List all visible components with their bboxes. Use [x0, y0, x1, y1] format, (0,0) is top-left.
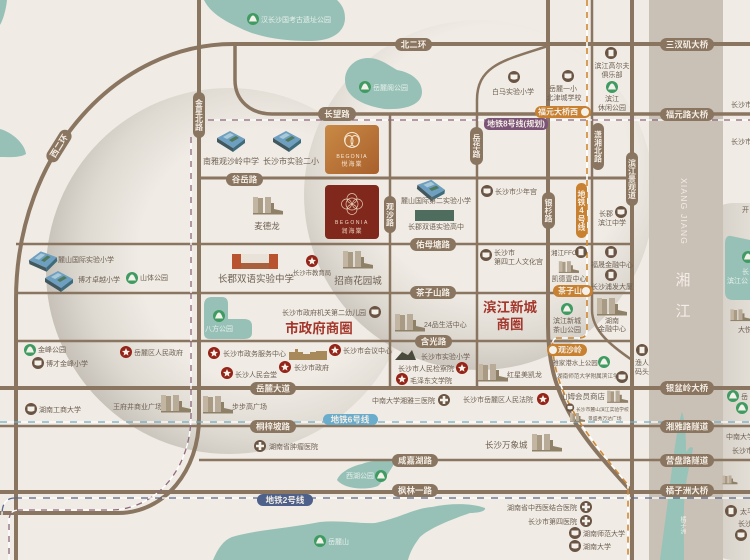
poi: 长沙市岳麓区人民法院 [463, 393, 549, 405]
road label: 潇湘北路 [592, 123, 604, 170]
metro station: 茶子山: 茶子山 [558, 286, 582, 296]
road label: 含光路: 含光路 [421, 336, 447, 346]
poi: 长沙市岳麓区人民法院: 长沙市岳麓区人民法院 [463, 395, 533, 404]
metro label: 地铁6号线: 地铁6号线 [331, 414, 370, 424]
poi: 汉长沙国考古遗址公园 [247, 13, 331, 25]
poi: 长郡双语实验中学: 长郡双语实验中学 [218, 273, 294, 285]
poi: 长郡滨江中学: 长郡 [599, 209, 613, 218]
poi: 长沙市会议中心: 长沙市会议中心 [343, 346, 392, 355]
poi: 中南大学湘雅三医院: 中南大学湘雅三医院 [372, 396, 435, 405]
poi: 滨江新城茶山公园 [553, 303, 581, 334]
poi: 长沙市会议中心 [329, 344, 392, 356]
poi: 长沙市实验小学 [395, 350, 470, 361]
road label: 长望路: 长望路 [324, 109, 350, 119]
poi: 长沙市实验二小: 长沙市实验二小 [263, 156, 319, 166]
poi: 白马实验小学 [492, 71, 534, 96]
east bank labels: 滨江公 [727, 276, 748, 285]
poi: 滨江高尔夫俱乐部: 滨江高尔夫 [594, 61, 630, 70]
shaded circle: riverside district [304, 20, 654, 370]
poi: 滨江休闲公园: 休闲公园 [598, 103, 626, 112]
poi: 长沙市人民检察院: 长沙市人民检察院 [398, 364, 454, 373]
poi: 湖南省中西医结合医院 [507, 501, 592, 513]
poi: 金峰公园: 金峰公园 [38, 345, 66, 354]
poi: 福晟金融中心 [591, 246, 633, 269]
poi: 雅家港水上公园 [552, 356, 610, 368]
poi: 湖南金融中心: 湖南 [605, 316, 619, 325]
poi: 景盛秀万达广场: 景盛秀万达广场 [588, 415, 622, 422]
east bank labels: 开 [742, 206, 749, 214]
tunnel label: 湘雅路隧道 [660, 420, 714, 433]
poi: 红星美凯龙 [478, 364, 542, 382]
logo: 悦海棠: BEGONIA [336, 154, 368, 160]
poi: 湖南大学 [569, 540, 611, 552]
river island: Juzizhou [660, 412, 693, 560]
road label: 观沙路: 观沙路 [386, 202, 394, 228]
poi: 长沙市第四工人文化宫: 长沙市 [494, 248, 515, 257]
poi: 长郡滨江中学 [598, 206, 627, 227]
poi: 长沙市麓山滨江实验学校: 长沙市麓山滨江实验学校 [576, 406, 629, 413]
poi: 长沙市政府 [279, 361, 329, 373]
metro station: 茶子山 [553, 285, 593, 297]
poi: 王府井商业广场 [113, 395, 191, 412]
poi: 长沙万象城: 长沙万象城 [485, 440, 528, 450]
poi: 凯德壹中心 [552, 261, 586, 283]
poi: 中南大学湘雅三医院 [372, 394, 450, 406]
logo: 润海棠: BEGONIA [335, 220, 369, 226]
road label: 岳华路 [470, 127, 483, 165]
poi: 滨江高尔夫俱乐部: 俱乐部 [602, 70, 622, 79]
poi: 汉长沙国考古遗址公园: 汉长沙国考古遗址公园 [261, 15, 331, 24]
poi: 长沙市教育局: 长沙市教育局 [293, 268, 331, 277]
poi: 长沙市政府机关第二幼儿园: 长沙市政府机关第二幼儿园 [282, 308, 366, 317]
poi: 长沙人民会堂: 长沙人民会堂 [235, 370, 277, 379]
road label: 西二环 [44, 127, 74, 165]
poi: 博才卓越小学 [45, 271, 120, 292]
skyline illustration [289, 349, 327, 360]
heading: 滨江新城商圈: 滨江新城 [483, 299, 537, 315]
poi: 麓山国际第二实验小学: 麓山国际第二实验小学 [401, 196, 471, 205]
poi: 长沙市教育局 [293, 255, 331, 277]
poi: 长沙浦发大厦 [591, 269, 633, 291]
poi: 湖南工商大学: 湖南工商大学 [39, 405, 81, 414]
poi: 湖南师范大学 [569, 527, 625, 539]
road label: 银杉路 [542, 192, 555, 229]
logo: 悦海棠: 悦海棠 [341, 160, 363, 168]
road label: 滨江景观道: 滨江景观道 [628, 158, 636, 200]
poi: 渔人码头: 渔人 [635, 358, 649, 367]
poi: 24品生活中心 [395, 314, 467, 332]
tunnel label: 营盘路隧道: 营盘路隧道 [666, 456, 709, 466]
logo: 润海棠: 润海棠 [341, 227, 363, 235]
road label: 佑母塘路: 佑母塘路 [416, 240, 450, 250]
poi: 长沙市麓山滨江实验学校 [566, 403, 629, 413]
metro label: 地铁4号线: 地铁4号线 [577, 189, 586, 231]
poi: 招商花园城 [334, 251, 382, 287]
road label: 桐梓坡路 [250, 420, 296, 433]
poi: 岳麓阁公园: 岳麓阁公园 [373, 83, 408, 92]
bridge label: 银盆岭大桥: 银盆岭大桥 [666, 383, 709, 393]
poi: 岳麓区人民政府: 岳麓区人民政府 [134, 348, 183, 357]
bridge label: 三汊矶大桥: 三汊矶大桥 [666, 40, 709, 50]
poi: 湖南省肿瘤医院: 湖南省肿瘤医院 [269, 442, 318, 451]
river label: 湘江 [675, 272, 691, 320]
road label: 茶子山路 [410, 286, 456, 299]
metro label: 地铁8号线(规划) [484, 118, 548, 130]
river: Xiang Jiang [649, 0, 723, 560]
poi: 王府井商业广场: 王府井商业广场 [113, 402, 162, 411]
east bank labels: 岳 [741, 393, 748, 401]
heading: 市政府商圈: 市政府商圈 [285, 320, 353, 336]
metro label: 地铁4号线 [576, 183, 587, 238]
metro station: 观沙岭: 观沙岭 [558, 344, 582, 354]
poi: 雅家港水上公园: 雅家港水上公园 [552, 358, 598, 367]
poi: 步步高广场 [203, 396, 267, 414]
road label: 西二环: 西二环 [48, 132, 70, 159]
river label: 湘江: 湘 [675, 272, 691, 289]
bridge label: 橘子洲大桥: 橘子洲大桥 [666, 486, 709, 496]
river label: XIANG JIANG: XIANG JIANG [679, 178, 689, 245]
road label: 含光路 [415, 335, 452, 348]
road label: 长望路 [318, 107, 356, 121]
road label: 北二环: 北二环 [401, 40, 427, 50]
bridge label: 银盆岭大桥 [660, 381, 714, 395]
poi: 岳麓一小北津城学校 [546, 70, 582, 102]
heading: 滨江新城商圈: 商圈 [496, 316, 524, 332]
metro station: 观沙岭 [547, 344, 587, 356]
bridge label: 橘子洲大桥 [660, 484, 714, 497]
road label: 潇湘北路: 潇湘北路 [594, 130, 602, 164]
poi: 滨江新城茶山公园: 滨江新城 [553, 316, 581, 325]
east bank labels [722, 100, 750, 541]
road label: 佑母塘路 [410, 238, 456, 251]
poi: 长郡双语实验高中: 长郡双语实验高中 [408, 222, 464, 231]
river label: 湘江: 江 [675, 303, 691, 320]
poi: 西湖公园: 西湖公园 [346, 471, 374, 480]
road label: 谷岳路: 谷岳路 [232, 174, 258, 184]
metro label: 地铁2号线 [257, 494, 313, 506]
road label: 岳华路: 岳华路 [472, 133, 481, 159]
poi: 长沙市第四工人文化宫 [480, 248, 543, 266]
metro label: 地铁8号线(规划): 地铁8号线(规划) [487, 118, 545, 128]
road label: 金星北路: 金星北路 [194, 98, 204, 132]
poi: 长沙市少年宫: 长沙市少年宫 [495, 187, 537, 196]
poi: 博才卓越小学: 博才卓越小学 [78, 275, 120, 284]
road label: 咸嘉湖路: 咸嘉湖路 [398, 456, 432, 466]
poi: 滨江高尔夫俱乐部 [594, 47, 630, 79]
poi: 长沙市第四医院 [528, 515, 592, 527]
poi: 南雅观沙岭中学 [203, 131, 259, 166]
poi: 长沙市人民检察院 [398, 362, 468, 374]
poi: 岳麓山 [314, 535, 349, 547]
poi: 湖南金融中心 [597, 298, 627, 333]
poi: 白马实验小学: 白马实验小学 [492, 87, 534, 96]
poi: 长沙万象城 [485, 434, 562, 452]
poi: 湖南大学: 湖南大学 [583, 542, 611, 551]
poi: 麓山国际实验小学 [28, 249, 114, 274]
road label: 金星北路 [193, 92, 205, 138]
poi: 金峰公园 [24, 344, 66, 356]
poi: 湖南师范大学: 湖南师范大学 [583, 529, 625, 538]
poi: 长郡双语实验高中 [408, 210, 464, 231]
poi: 长沙市政府机关第二幼儿园 [282, 306, 381, 318]
poi: 凯德壹中心: 凯德壹中心 [552, 274, 586, 283]
poi: 山体公园: 山体公园 [140, 273, 168, 282]
poi: 岳麓阁公园 [359, 81, 408, 93]
poi: 麦德龙 [253, 197, 283, 231]
poi: 湖南师范大学附属滨江学校: 湖南师范大学附属滨江学校 [557, 372, 625, 380]
east bank labels: 长 [742, 267, 749, 276]
poi: 麓山国际实验小学: 麓山国际实验小学 [58, 255, 114, 264]
metro station: 福元大桥西 [535, 106, 591, 118]
poi: 长郡滨江中学: 滨江中学 [598, 218, 626, 227]
poi: 博才金峰小学: 博才金峰小学 [46, 359, 88, 368]
poi: 博才金峰小学 [32, 357, 88, 369]
poi: 滨江休闲公园 [598, 81, 626, 112]
road label: 北二环 [395, 38, 432, 51]
metro label: 地铁2号线: 地铁2号线 [266, 495, 305, 505]
poi: 湖南师范大学附属滨江学校 [557, 371, 628, 383]
road label: 枫林一路: 枫林一路 [398, 486, 432, 496]
poi: 山姆会员商店: 山姆会员商店 [560, 391, 605, 401]
road label: 谷岳路 [226, 173, 263, 186]
road label: 枫林一路 [392, 484, 438, 497]
poi: 渔人码头: 码头 [635, 367, 649, 376]
poi: 长沙市少年宫 [481, 185, 537, 197]
road label: 岳麓大道: 岳麓大道 [256, 384, 290, 394]
poi: 毛泽东文学院: 毛泽东文学院 [410, 376, 452, 385]
road label: 岳麓大道 [250, 382, 296, 395]
poi: 招商花园城: 招商花园城 [334, 275, 382, 287]
poi: 毛泽东文学院 [396, 373, 452, 385]
poi: 岳麓一小北津城学校: 北津城学校 [546, 93, 582, 102]
tunnel label: 湘雅路隧道: 湘雅路隧道 [666, 422, 709, 432]
poi: 步步高广场: 步步高广场 [232, 402, 267, 411]
poi: 西湖公园 [346, 470, 387, 482]
poi: 八方公园 [205, 310, 233, 333]
road label: 茶子山路: 茶子山路 [416, 288, 450, 298]
poi: 湘江FFC [551, 246, 587, 258]
bridge label: 福元路大桥: 福元路大桥 [666, 110, 709, 120]
heading: 滨江新城商圈 [483, 299, 537, 332]
poi: 长沙市实验二小 [263, 131, 319, 166]
road label: 桐梓坡路: 桐梓坡路 [256, 422, 290, 432]
logo: 润海棠 [325, 185, 379, 239]
poi: 渔人码头 [635, 344, 649, 376]
poi: 麦德龙: 麦德龙 [254, 221, 280, 231]
poi: 长沙市实验小学: 长沙市实验小学 [421, 352, 470, 361]
road label: 观沙路 [384, 196, 396, 233]
poi: 景盛秀万达广场 [570, 413, 622, 422]
poi: 湘江FFC: 湘江FFC [551, 248, 577, 257]
poi: 南雅观沙岭中学: 南雅观沙岭中学 [203, 156, 259, 166]
poi: 湖南省肿瘤医院 [254, 440, 318, 452]
shaded circle: west district [46, 88, 412, 454]
island label: 橘子洲: 橘子洲 [679, 515, 686, 534]
poi: 长沙市第四工人文化宫: 第四工人文化宫 [494, 257, 543, 266]
poi: 长沙人民会堂 [221, 367, 277, 379]
poi: 湖南工商大学 [25, 403, 81, 415]
poi: 麓山国际第二实验小学 [401, 178, 471, 205]
road label: 咸嘉湖路 [392, 454, 438, 467]
poi: 岳麓山: 岳麓山 [328, 537, 349, 546]
poi: 岳麓区人民政府 [120, 346, 183, 358]
poi: 长沙市第四医院: 长沙市第四医院 [528, 517, 577, 526]
poi: 山体公园 [126, 272, 168, 284]
poi: 滨江新城茶山公园: 茶山公园 [553, 325, 581, 334]
poi: 24品生活中心: 24品生活中心 [424, 320, 467, 329]
poi: 长沙市政府: 长沙市政府 [294, 363, 329, 372]
logo: 悦海棠 [325, 125, 379, 174]
poi: 八方公园: 八方公园 [205, 324, 233, 333]
poi: 湖南省中西医结合医院: 湖南省中西医结合医院 [507, 503, 577, 512]
poi: 山姆会员商店 [560, 391, 628, 403]
bridge label: 福元路大桥 [660, 108, 714, 121]
road label: 银杉路: 银杉路 [544, 198, 553, 224]
poi: 滨江休闲公园: 滨江 [605, 94, 619, 103]
poi: 长沙浦发大厦: 长沙浦发大厦 [591, 282, 633, 291]
poi: 福晟金融中心: 福晟金融中心 [591, 260, 633, 269]
poi: 岳麓一小北津城学校: 岳麓一小 [549, 84, 577, 93]
poi: 长沙市政务服务中心: 长沙市政务服务中心 [223, 349, 286, 358]
tunnel label: 营盘路隧道 [660, 454, 714, 467]
poi: 红星美凯龙: 红星美凯龙 [507, 370, 542, 379]
metro station: 福元大桥西: 福元大桥西 [538, 106, 578, 116]
metro label: 地铁6号线 [323, 414, 378, 425]
poi: 长沙市政务服务中心 [208, 347, 286, 359]
road label: 滨江景观道 [626, 152, 638, 206]
poi: 湖南金融中心: 金融中心 [598, 324, 626, 333]
shaded area: east bank [700, 203, 750, 560]
poi: 长郡双语实验中学 [218, 254, 294, 285]
bridge label: 三汊矶大桥 [660, 38, 714, 51]
